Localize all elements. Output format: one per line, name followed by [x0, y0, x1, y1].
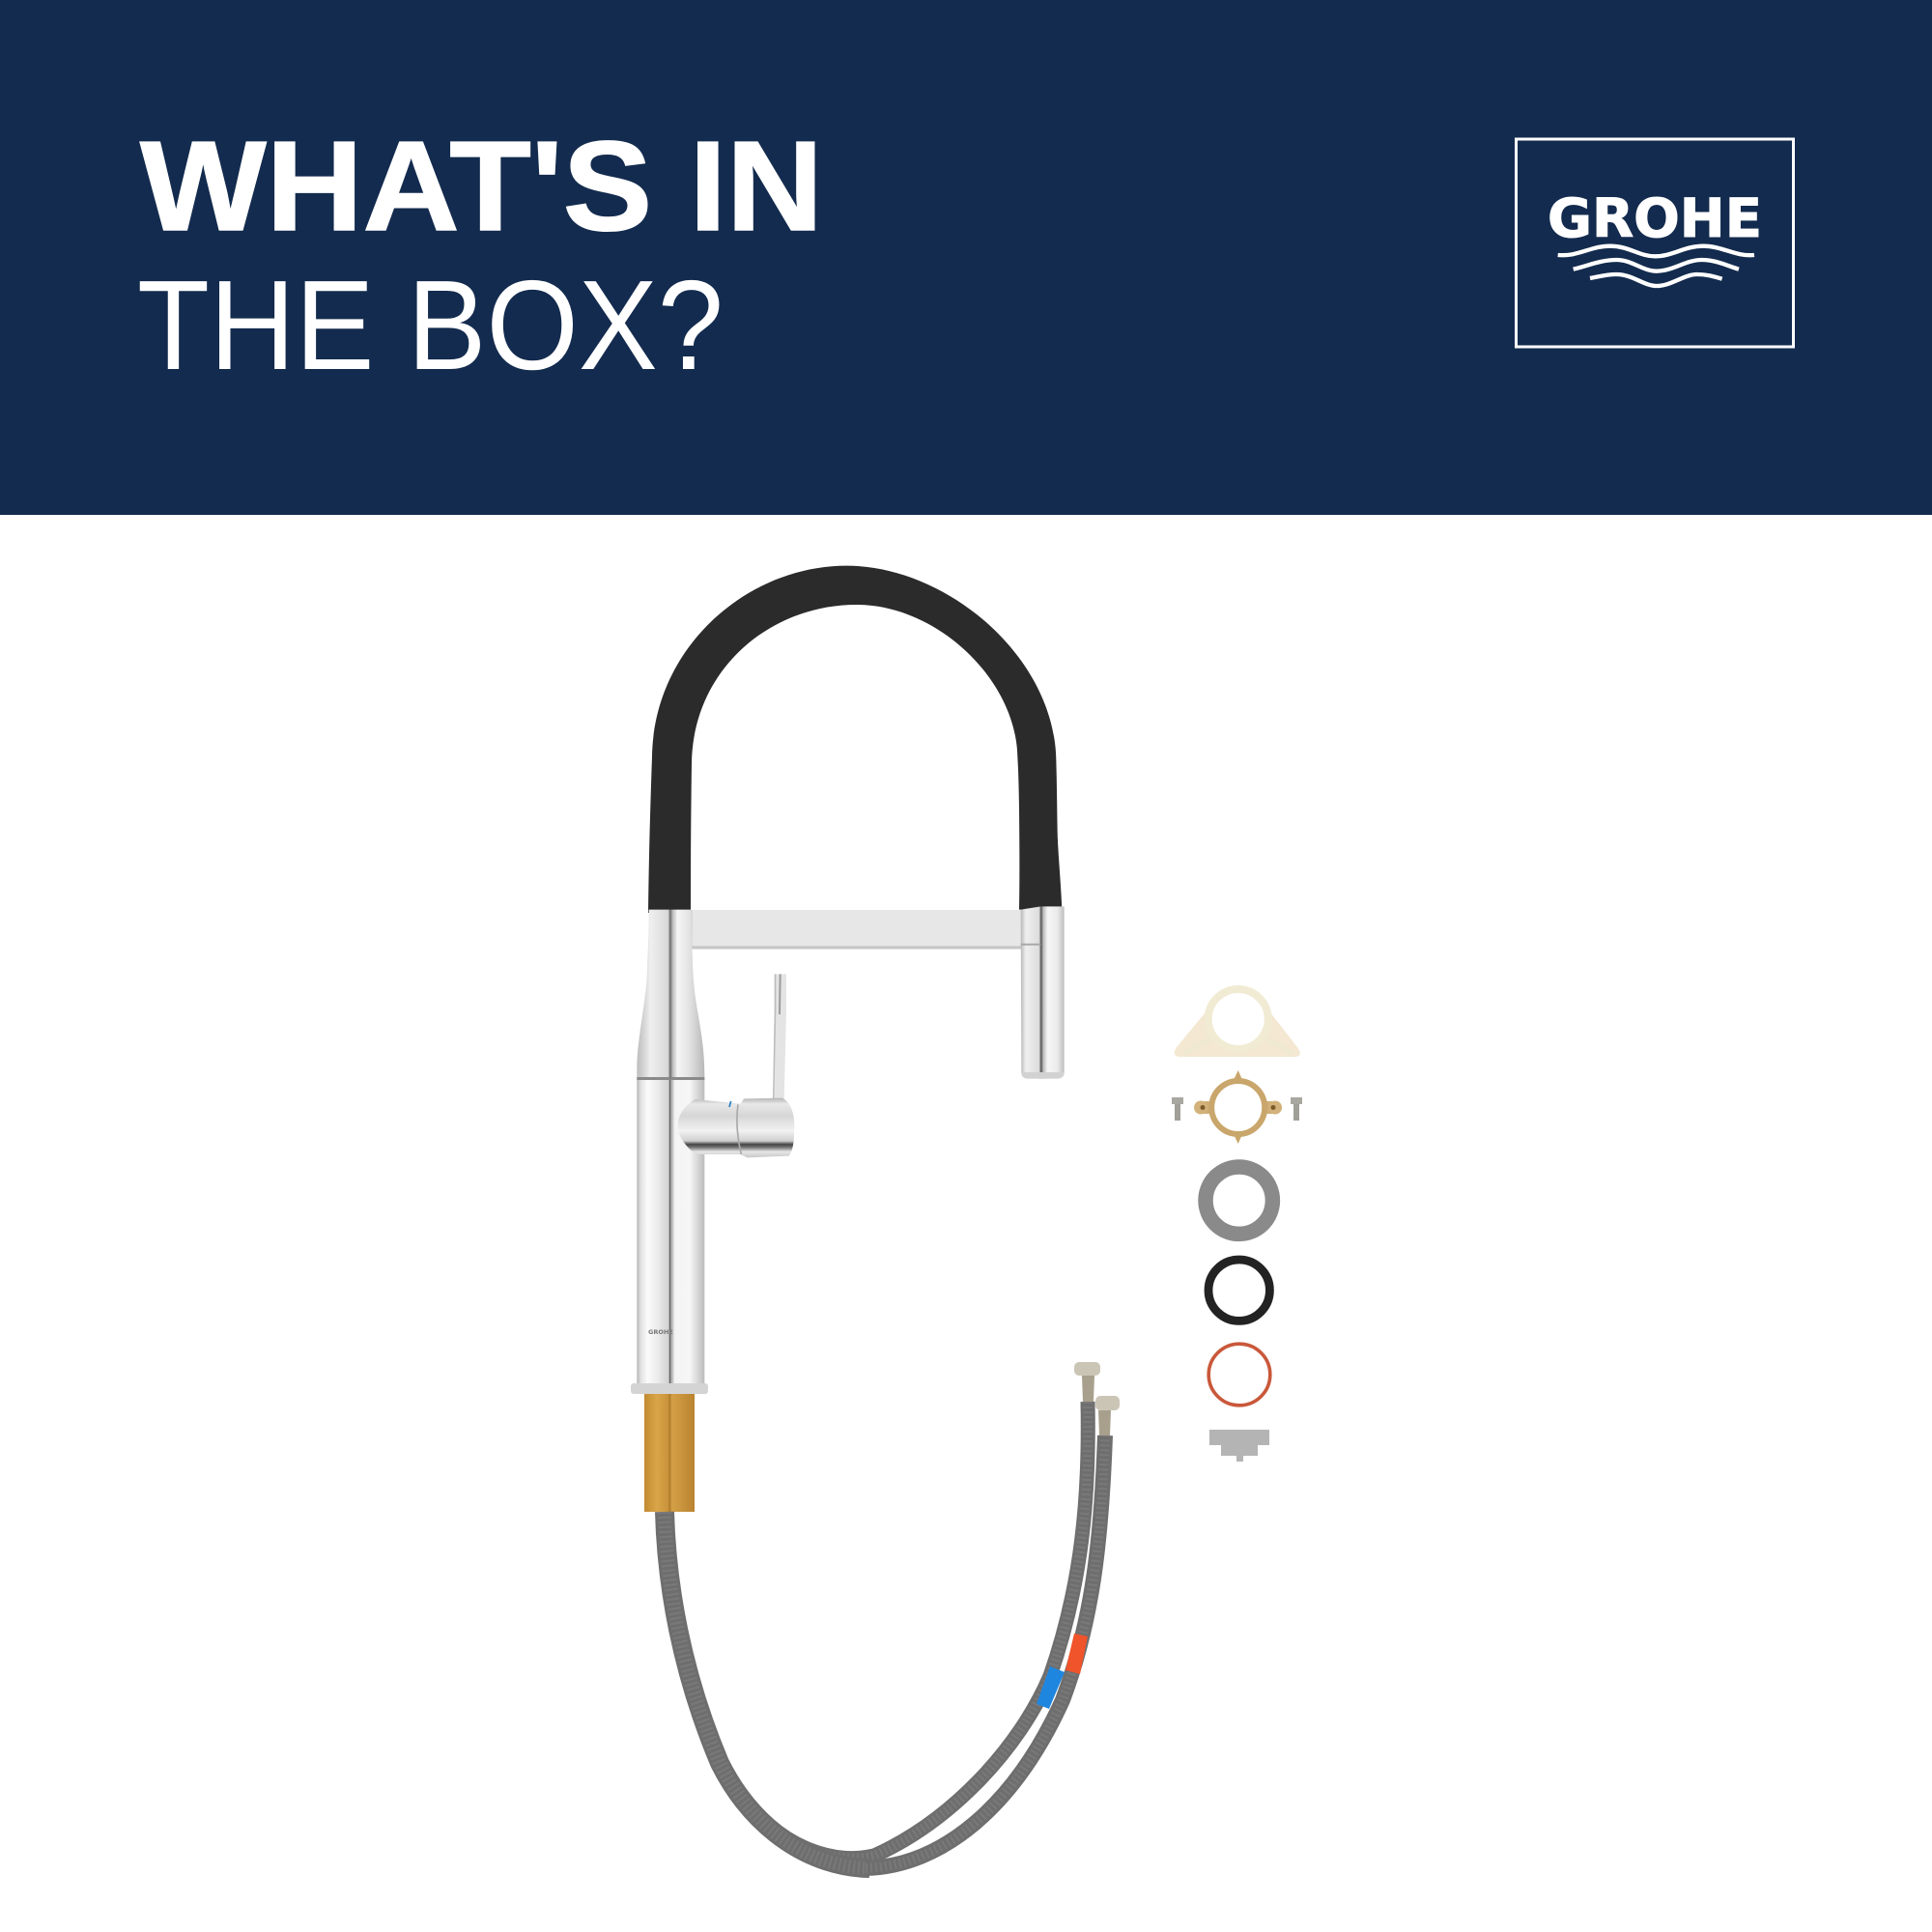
- left supply hose: [770, 1402, 1088, 1859]
- small parts column: [1172, 989, 1302, 1462]
- brass shank: [644, 1394, 695, 1512]
- header banner: [0, 0, 1932, 515]
- GROHE logo: GROHE: [1548, 187, 1762, 249]
- hose connector one: [1074, 1362, 1100, 1402]
- plastic mounting bracket: [1175, 989, 1300, 1057]
- hose connector two: [1095, 1396, 1120, 1435]
- brass ring with screws: [1172, 1070, 1302, 1144]
- red hot marker: [1065, 1634, 1088, 1674]
- right supply hose: [866, 1435, 1105, 1868]
- title: THE BOX?: [137, 254, 724, 396]
- pull-out hose: [665, 1512, 869, 1868]
- red o-ring: [1208, 1344, 1270, 1406]
- body logo mark: GROHE: [648, 1328, 673, 1336]
- chrome parts: [637, 906, 1065, 1384]
- black flexible spout hose: [648, 566, 1062, 913]
- GROHE logo: [1517, 139, 1793, 347]
- title: [137, 115, 823, 396]
- grey aerator key: [1209, 1430, 1269, 1462]
- mounting flange: [631, 1383, 708, 1394]
- lever: [773, 974, 786, 1099]
- title: WHAT'S IN: [140, 115, 823, 257]
- faucet neck: [637, 910, 704, 1080]
- mixer handle: [678, 1098, 794, 1157]
- supply hoses: [665, 1362, 1120, 1868]
- blue cold marker: [1037, 1666, 1065, 1709]
- spray head: [1021, 906, 1065, 1079]
- faucet main body: [637, 910, 704, 1384]
- crossbar: [685, 910, 1022, 950]
- grey washer: [1206, 1167, 1272, 1234]
- black washer: [1208, 1260, 1269, 1321]
- faucet: [631, 566, 1065, 1512]
